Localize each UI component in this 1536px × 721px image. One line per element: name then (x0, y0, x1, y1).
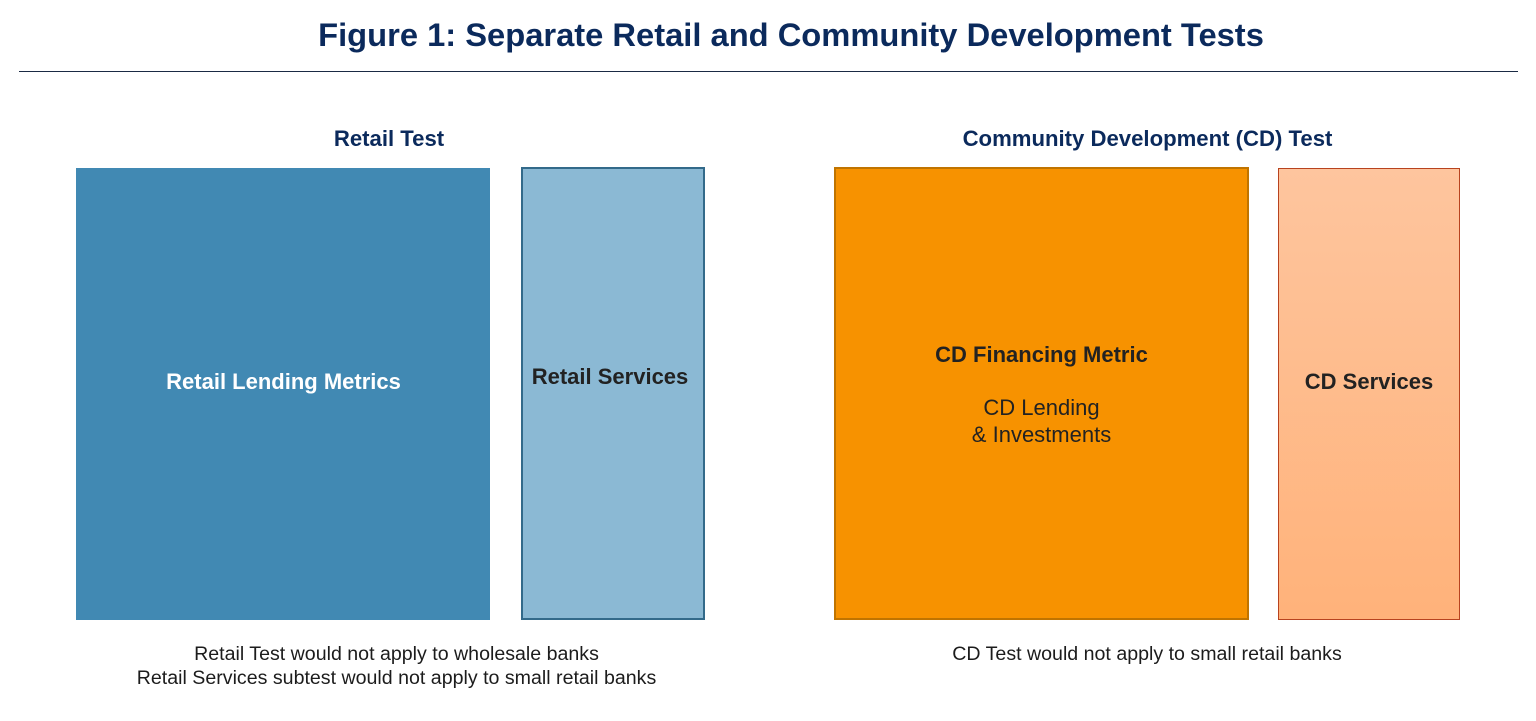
panel: cd services (1278, 168, 1460, 620)
note: cd test applicability: CD Test would not apply to small retail banks (952, 643, 1342, 665)
title: Figure 1: Separate Retail and Community Development Tests (318, 16, 1264, 53)
heading: retail test: Retail Test (334, 126, 444, 151)
text: cd lending and investments: CD Lending (983, 395, 1100, 420)
label: cd financing metric: CD Financing Metric (935, 342, 1148, 367)
panel: retail services (521, 167, 705, 620)
panel: retail lending metrics (76, 168, 490, 620)
label: retail lending metrics: Retail Lending Metrics (166, 369, 401, 394)
text: cd lending and investments (972, 395, 1111, 447)
text: cd lending and investments: & Investments (972, 422, 1111, 447)
panel: cd financing metric (834, 167, 1249, 620)
note: retail test applicability (137, 643, 656, 689)
heading: community development test: Community Development (CD) Test (963, 126, 1332, 151)
label: retail services: Retail Services (532, 364, 688, 389)
label: cd services: CD Services (1305, 369, 1433, 394)
note: retail test applicability: Retail Services subtest would not apply to small retail banks (137, 667, 656, 689)
note: retail test applicability: Retail Test would not apply to wholesale banks (194, 643, 599, 665)
